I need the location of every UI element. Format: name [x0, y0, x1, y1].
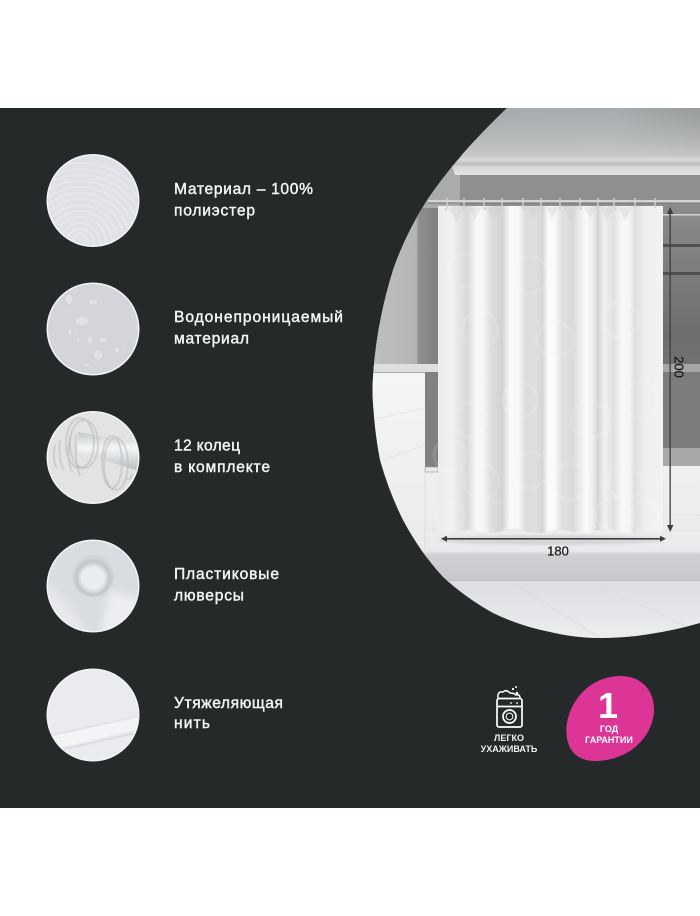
feature 2: water drops circle: [46, 282, 140, 376]
text: waterproof: Водонепроницаемый: [174, 309, 343, 326]
feature 5: weighted hem circle: [46, 668, 140, 762]
left wall: [374, 208, 438, 368]
text: rings: 12 колец: [174, 438, 240, 454]
text: easy care: УХАЖИВАТЬ: [481, 744, 538, 754]
height arrow: [667, 207, 673, 532]
text: material: полиэстер: [174, 202, 255, 220]
photo: bathroom with shower curtain: [360, 108, 700, 640]
text: grommets: [174, 566, 279, 604]
icon: washing machine: [497, 686, 522, 727]
curtain rod: [428, 200, 700, 275]
curtain: [434, 206, 663, 533]
wall tiles: [360, 364, 700, 556]
height label: 200: [672, 356, 686, 378]
text: weight thread: Утяжеляющая: [174, 695, 283, 712]
upper wall: [460, 175, 700, 207]
badge: one year warranty: [566, 676, 654, 761]
badge caption: ГАРАНТИИ: [585, 735, 633, 745]
width arrow: [441, 536, 666, 542]
bath front: [422, 551, 700, 582]
text: waterproof: [174, 309, 343, 348]
ceiling: [461, 108, 700, 156]
width label: 180: [547, 544, 569, 558]
curtain shadow on tiles: [438, 535, 662, 545]
text: rings: в комплекте: [174, 459, 270, 476]
right dark niche: [663, 207, 700, 364]
text: weight thread: нить: [174, 715, 210, 732]
floor: [446, 580, 700, 638]
text: rings: [174, 438, 270, 476]
text: grommets: Пластиковые: [174, 566, 279, 583]
text: material: [174, 181, 313, 220]
text: weight thread: [174, 695, 283, 732]
text: material: Материал – 100%: [174, 181, 313, 198]
badge number: 1: [598, 685, 618, 726]
twelve curtain rings: [445, 198, 655, 210]
text: easy care: ЛЕГКО: [494, 733, 524, 743]
badge caption: ГОД: [600, 724, 619, 734]
cornice: [452, 155, 700, 175]
curtain circle pattern: [432, 442, 438, 467]
feature 4: plastic grommet circle: [46, 539, 140, 633]
feature 3: rings on rod circle: [46, 411, 145, 505]
photo base wall: [372, 108, 507, 408]
text: waterproof: материал: [174, 330, 249, 348]
dark background panel: [0, 108, 700, 808]
feature 1: fabric circle: [46, 154, 140, 247]
text: grommets: люверсы: [174, 588, 244, 604]
